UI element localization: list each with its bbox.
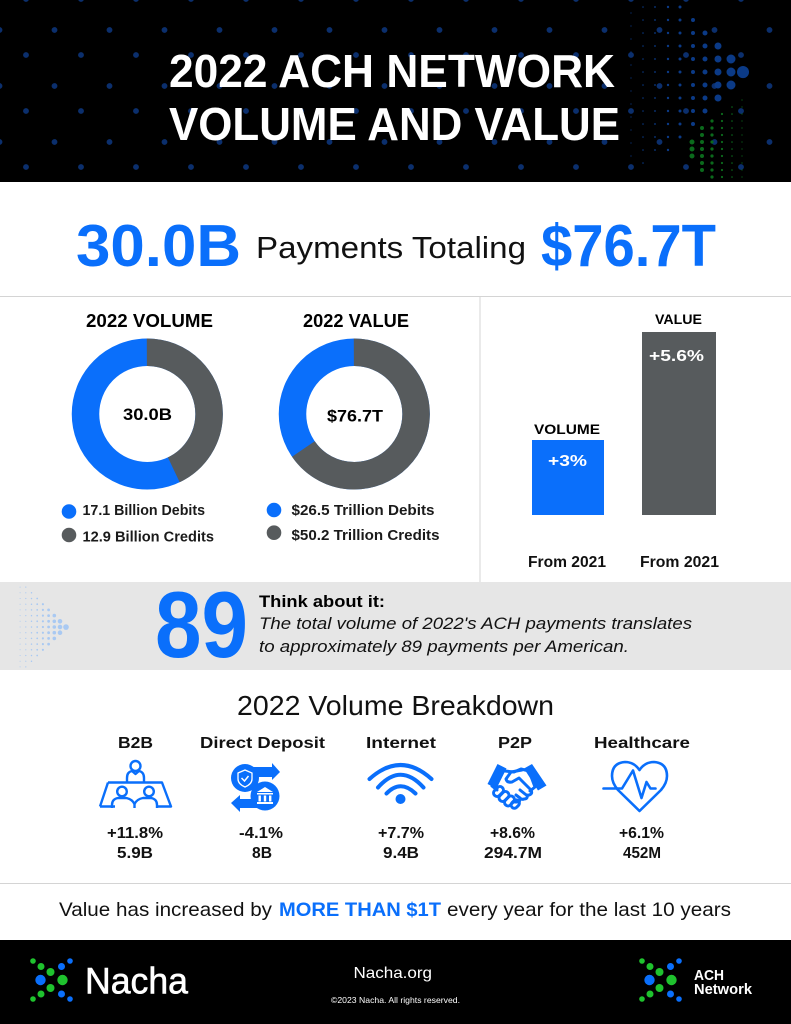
bar chart: growth from 2021 xyxy=(528,311,719,571)
logo: Nacha: Nacha xyxy=(85,960,188,1002)
callout: think about it band xyxy=(0,572,791,677)
heading: volume breakdown: 2022 Volume Breakdown xyxy=(237,690,554,721)
donut chart: value: $76.7T xyxy=(327,406,384,426)
category: P2P: 294.7M xyxy=(484,845,542,862)
category: Internet: 9.4B xyxy=(383,845,419,862)
footer link and copyright xyxy=(331,965,460,1005)
category: Internet: Internet xyxy=(366,735,437,752)
panel: 2022 value donut xyxy=(267,311,440,544)
icon: shield and bank with arrows xyxy=(231,763,280,812)
callout text: Think about it: xyxy=(259,592,385,611)
category: B2B: 5.9B xyxy=(117,845,153,862)
heading: 2022 volume: 2022 VOLUME xyxy=(86,311,213,331)
category: P2P: P2P xyxy=(498,735,532,752)
title: VOLUME AND VALUE xyxy=(169,98,620,150)
header banner xyxy=(0,0,791,182)
icon: heart with pulse xyxy=(604,762,667,811)
legend: value: $26.5 Trillion Debits xyxy=(292,503,434,519)
bar: value: +5.6% xyxy=(649,348,704,365)
category: Internet xyxy=(366,735,437,862)
category: P2P: +8.6% xyxy=(490,825,535,842)
title xyxy=(169,45,620,150)
category: Healthcare xyxy=(594,735,690,862)
logo: ACH Network xyxy=(639,958,753,1002)
legend: volume xyxy=(62,503,214,546)
donut chart: volume xyxy=(86,352,209,476)
statement: value increase: every year for the last 10 years xyxy=(447,899,731,921)
bar: volume: VOLUME xyxy=(534,421,600,437)
bar: volume: From 2021 xyxy=(528,554,606,571)
category: B2B xyxy=(100,735,171,862)
category: P2P xyxy=(484,735,546,862)
icon: meeting table xyxy=(100,761,171,808)
title: 2022 ACH NETWORK xyxy=(169,45,615,97)
category: Healthcare: Healthcare xyxy=(594,735,690,752)
legend: volume: 17.1 Billion Debits xyxy=(82,503,205,519)
callout text xyxy=(259,592,693,656)
headline totals xyxy=(76,213,716,279)
callout text: The total volume of 2022's ACH payments translates xyxy=(259,614,693,633)
category: Direct Deposit: 8B xyxy=(252,845,272,862)
bar: value xyxy=(640,311,719,571)
category: Direct Deposit: -4.1% xyxy=(239,825,283,842)
category: B2B: +11.8% xyxy=(107,825,163,842)
category: B2B: B2B xyxy=(118,735,153,752)
legend: value xyxy=(267,503,440,544)
panel: 2022 volume donut xyxy=(62,311,214,546)
logo: Nacha xyxy=(30,958,188,1002)
headline totals: $76.7T xyxy=(541,213,716,279)
statement: value increase xyxy=(59,899,731,921)
headline totals: Payments Totaling xyxy=(256,230,526,265)
statement: value increase: Value has increased by xyxy=(59,899,272,921)
category: Internet: +7.7% xyxy=(378,825,424,842)
donut chart: value xyxy=(292,352,416,476)
bar: volume xyxy=(528,421,606,571)
logo: ACH Network: Network xyxy=(694,981,753,998)
logo: ACH Network: ACH xyxy=(694,967,724,984)
icon: dotted arrow xyxy=(20,587,66,667)
bar: value: From 2021 xyxy=(640,554,719,571)
heading: 2022 value: 2022 VALUE xyxy=(303,311,409,331)
headline totals: 30.0B xyxy=(76,213,241,279)
big number 89: 89 xyxy=(155,572,248,677)
bar: volume: +3% xyxy=(548,453,587,470)
category: Direct Deposit xyxy=(200,735,326,862)
legend: volume: 12.9 Billion Credits xyxy=(82,530,214,546)
category: Healthcare: +6.1% xyxy=(619,825,664,842)
footer link and copyright: Nacha.org xyxy=(354,965,432,982)
statement: value increase: MORE THAN $1T xyxy=(279,899,441,921)
legend: value: $50.2 Trillion Credits xyxy=(292,528,440,544)
donut chart: volume: 30.0B xyxy=(123,405,172,424)
category: Healthcare: 452M xyxy=(623,845,661,862)
footer xyxy=(0,940,791,1024)
icon: wifi xyxy=(370,765,432,804)
bar: value: VALUE xyxy=(655,311,702,327)
icon: handshake xyxy=(488,764,546,810)
footer link and copyright: ©2023 Nacha. All rights reserved. xyxy=(331,995,460,1005)
callout text: to approximately 89 payments per American. xyxy=(259,637,629,656)
category: Direct Deposit: Direct Deposit xyxy=(200,735,326,752)
